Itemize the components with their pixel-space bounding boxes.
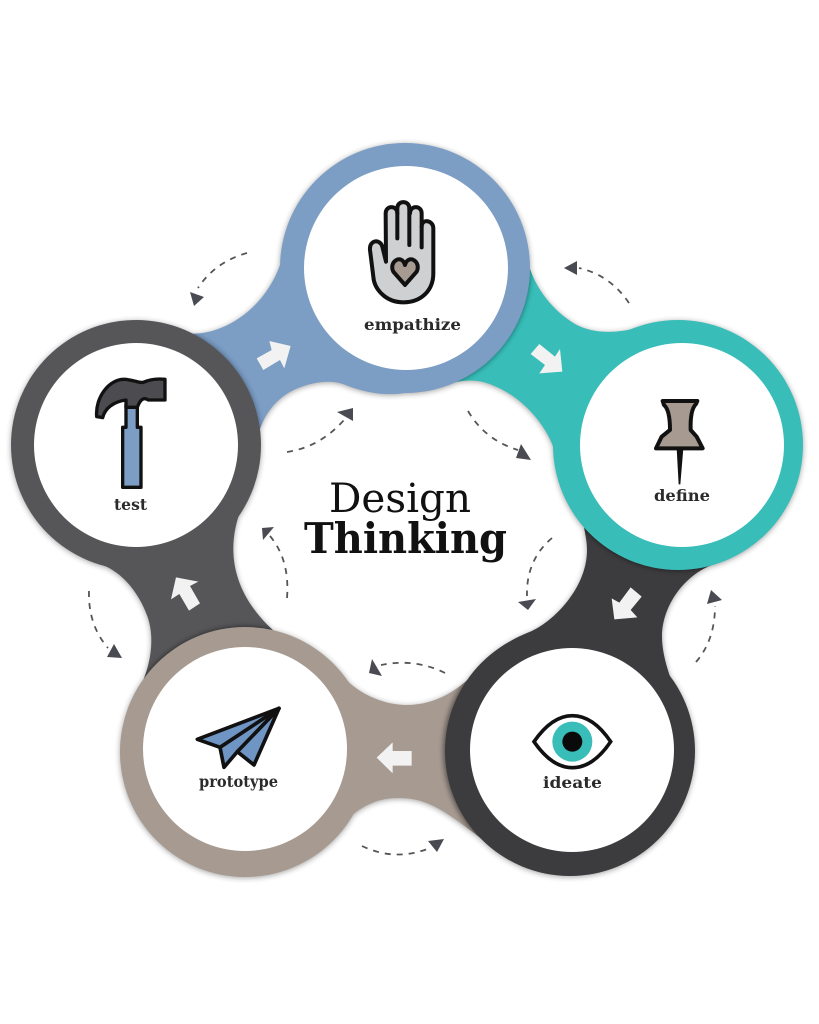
dashed arrow: inner right (518, 538, 552, 610)
connector: prototype to test (75, 445, 275, 752)
label: test: test (114, 495, 148, 514)
dashed arrow: outer left (89, 591, 122, 658)
title: Design Thinking: Thinking (304, 514, 507, 563)
arrow: ideate to prototype (377, 742, 412, 773)
icon: hammer (97, 379, 165, 487)
icon: push pin (656, 401, 703, 484)
connector: define to ideate (490, 445, 712, 751)
node: prototype (120, 627, 370, 877)
dashed arrow: inner top left (287, 408, 353, 452)
dashed arrow: outer bottom (362, 839, 444, 855)
arrow: define to ideate (612, 587, 642, 619)
dashed arrow: outer top left (190, 253, 247, 306)
connector: empathize to define (405, 262, 685, 452)
arrow: test to empathize (257, 341, 291, 370)
dashed arrow: inner bottom (369, 659, 445, 676)
icon: paper plane (197, 708, 279, 767)
icon: eye (534, 716, 611, 768)
label: prototype: prototype (199, 772, 278, 791)
icon: hand with heart (370, 202, 433, 302)
title: Design Thinking: Design (329, 476, 471, 522)
ring shadows cast on neighbouring connectors (10, 142, 804, 878)
arrow: prototype to test (171, 577, 200, 611)
dashed arrow: outer top right (564, 261, 629, 303)
connector: test to empathize (136, 265, 405, 445)
label: define: define (654, 486, 710, 505)
dashed arrow: inner top right (468, 411, 531, 460)
node: empathize (280, 143, 530, 393)
title: Design Thinking (304, 476, 507, 563)
soft shadow of the whole ring structure (11, 144, 803, 878)
dashed arrow: inner left (262, 527, 287, 598)
connector: ideate to prototype (245, 664, 570, 840)
node: test (11, 320, 261, 570)
arrow: empathize to define (531, 344, 562, 373)
dashed arrow: outer right (696, 590, 722, 662)
node: ideate (445, 626, 695, 876)
label: empathize: empathize (364, 315, 461, 334)
label: ideate: ideate (543, 773, 602, 792)
node: define (553, 320, 803, 570)
